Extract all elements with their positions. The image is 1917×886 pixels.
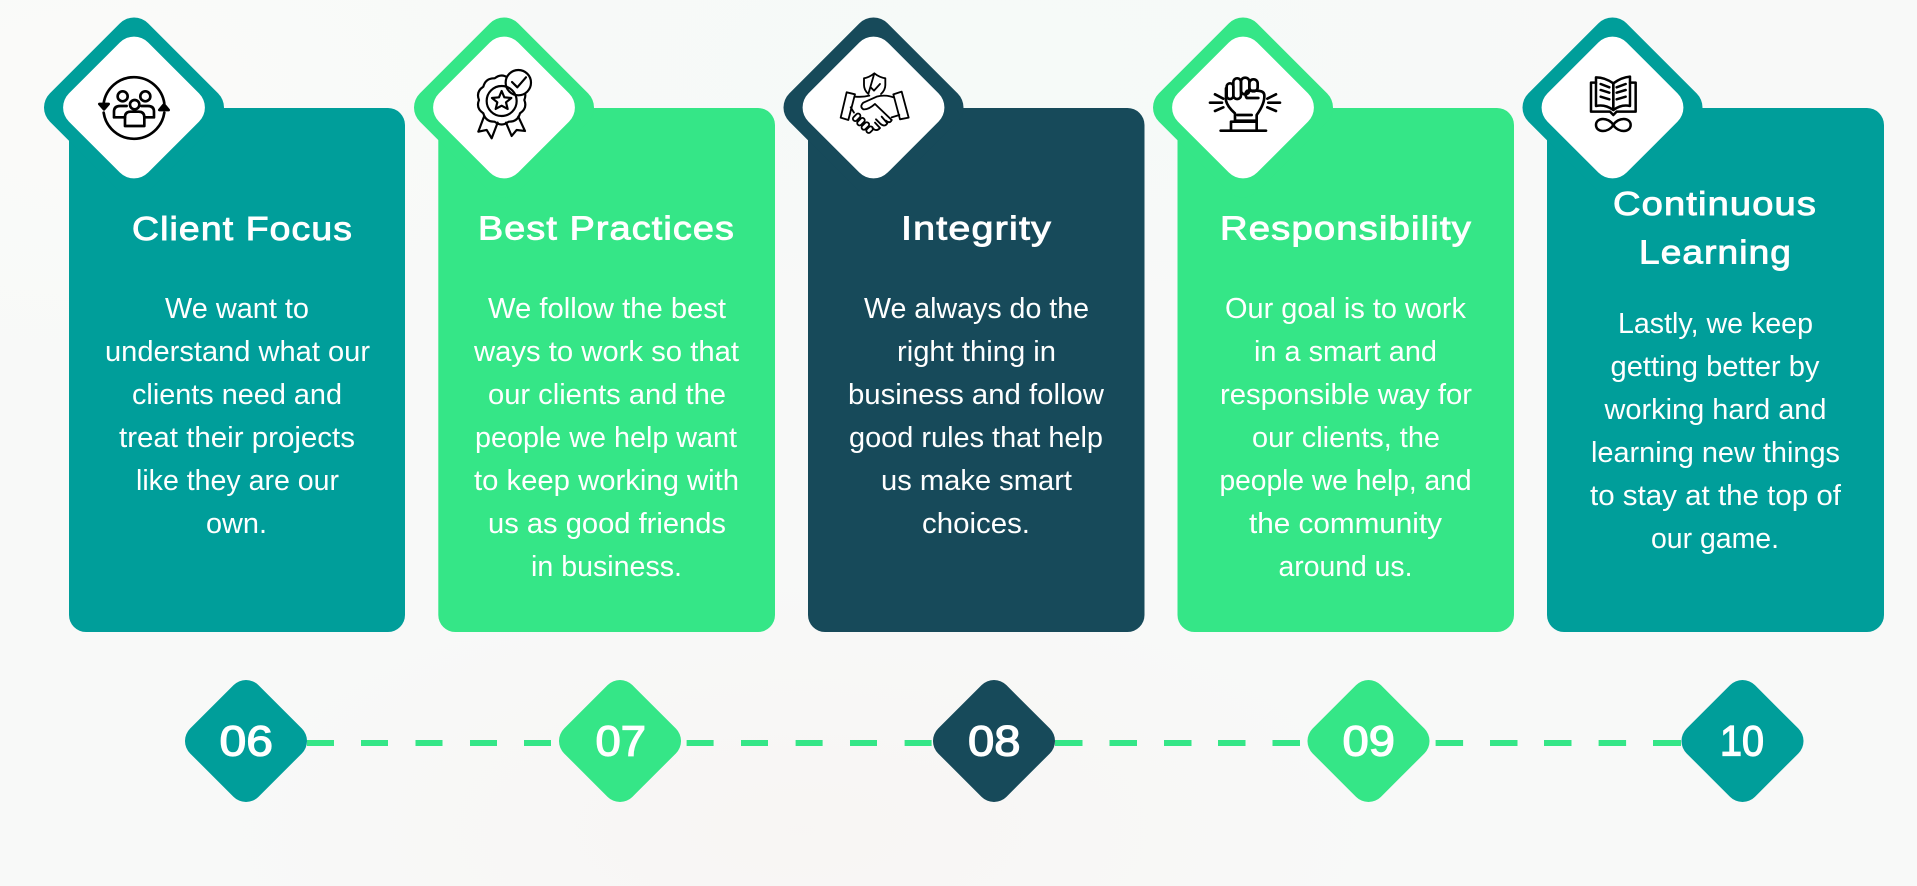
body text: learning new things (1591, 437, 1840, 469)
panel: integrity (775, 9, 1144, 632)
body text: choices. (922, 508, 1030, 540)
marker diamond (178, 673, 314, 809)
body text: like they are our (136, 465, 339, 497)
icon: open book with infinity (1591, 77, 1636, 131)
body text: to stay at the top of (1590, 480, 1841, 512)
body text: We want to (165, 293, 309, 325)
number: 07 (596, 718, 646, 766)
body text: right thing in (897, 336, 1056, 368)
heading: Client Focus (132, 210, 353, 247)
icon: raised fist (1210, 78, 1280, 131)
card background (1178, 108, 1514, 632)
body text: good rules that help (849, 422, 1103, 454)
body text: We always do the (864, 293, 1089, 325)
body text: to keep working with (474, 465, 739, 497)
white icon diamond (1164, 28, 1322, 187)
outer diamond (406, 9, 602, 206)
body text: us as good friends (488, 508, 726, 540)
body text: business and follow (848, 379, 1104, 411)
body text: treat their projects (119, 422, 355, 454)
timeline dashes (307, 740, 1681, 746)
panel: client focus (36, 9, 405, 632)
body text (105, 293, 371, 540)
white icon diamond (794, 28, 953, 187)
heading: Integrity (901, 210, 1052, 246)
body text: responsible way for (1220, 379, 1473, 411)
icon: award badge (478, 70, 531, 138)
body text (1220, 293, 1473, 583)
outer diamond (36, 9, 232, 206)
body text: our clients and the (488, 379, 726, 411)
body text: our clients, the (1252, 422, 1440, 454)
body text: understand what our (105, 336, 371, 368)
heading: Best Practices (478, 210, 735, 246)
card background (438, 108, 775, 632)
step marker 06 (178, 673, 314, 809)
heading second line: Learning (1639, 234, 1792, 270)
body text: us make smart (881, 465, 1072, 497)
body text: clients need and (132, 379, 342, 411)
body text: working hard and (1603, 394, 1826, 426)
panel: responsibility (1145, 9, 1514, 632)
step marker 10 (1674, 673, 1811, 809)
number: 10 (1720, 718, 1764, 766)
heading: Responsibility (1220, 210, 1472, 246)
step marker 09 (1300, 673, 1437, 809)
heading: Continuous (1613, 185, 1817, 222)
body text: Our goal is to work (1225, 293, 1467, 325)
white icon diamond (425, 28, 583, 187)
number: 09 (1342, 718, 1395, 766)
panel: continuous learning (1514, 9, 1884, 632)
outer diamond (775, 9, 972, 206)
body text: our game. (1651, 523, 1779, 555)
body text: in business. (531, 551, 682, 583)
marker diamond (926, 673, 1062, 809)
outer diamond (1145, 9, 1341, 206)
body text: We follow the best (488, 293, 726, 325)
white icon diamond (55, 28, 213, 187)
body text: Lastly, we keep (1618, 308, 1813, 340)
body text: people we help, and (1220, 465, 1472, 497)
body text (1590, 308, 1841, 555)
panel: best practices (406, 9, 775, 632)
body text: in a smart and (1254, 336, 1437, 368)
body text: ways to work so that (473, 336, 739, 368)
marker diamond (552, 673, 688, 809)
card background (69, 108, 405, 632)
marker diamond (1674, 673, 1811, 809)
white icon diamond (1533, 28, 1692, 187)
body text (848, 293, 1104, 540)
step marker 07 (552, 673, 688, 809)
body text: around us. (1278, 551, 1412, 583)
card background (1547, 108, 1884, 632)
card background (808, 108, 1144, 632)
step marker 08 (926, 673, 1062, 809)
outer diamond (1514, 9, 1711, 206)
number: 06 (220, 718, 273, 766)
icon: handshake with shield (841, 73, 909, 134)
body text: people we help want (475, 422, 737, 454)
number: 08 (968, 718, 1020, 766)
body text (473, 293, 739, 583)
icon: people cycle (99, 77, 169, 139)
body text: the community (1249, 508, 1443, 540)
marker diamond (1300, 673, 1437, 809)
body text: getting better by (1610, 351, 1820, 383)
body text: own. (206, 508, 267, 540)
